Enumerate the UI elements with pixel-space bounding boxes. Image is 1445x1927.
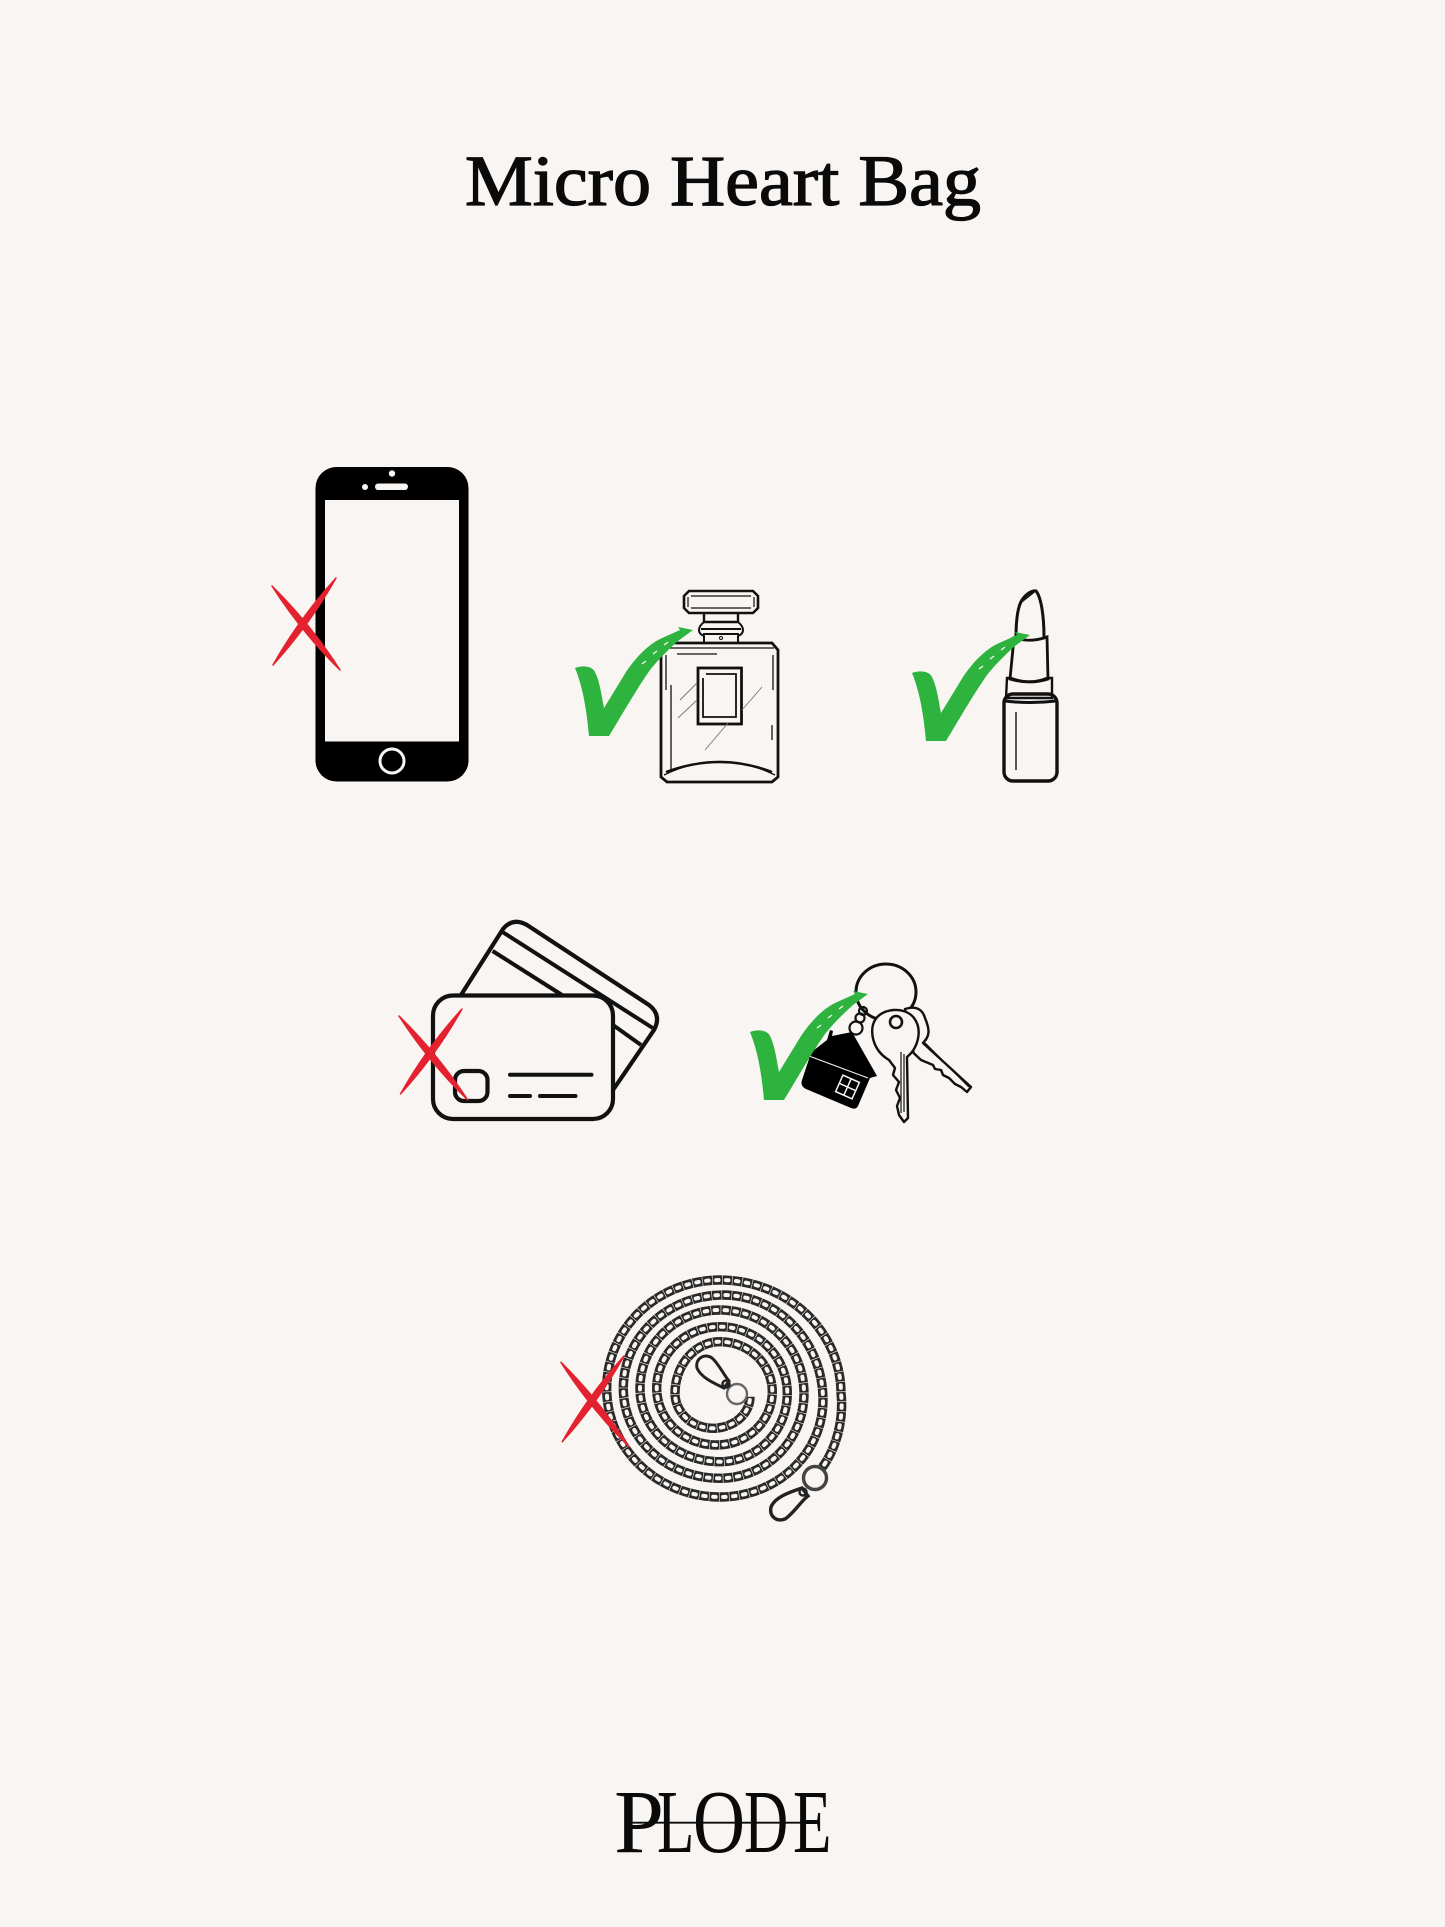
keychain links [850,1007,867,1034]
red cross [399,1009,468,1100]
icon: coiled chain strap with red cross [561,1280,842,1520]
green check [912,632,1030,741]
green check [575,627,693,736]
logo: PLODE wordmark [614,1771,831,1872]
lipstick [1004,591,1057,781]
key front [872,1010,919,1122]
logo: PLODE wordmark: P [614,1773,664,1872]
outer clasp [771,1466,826,1520]
icon: credit cards with red cross [399,922,657,1119]
title: Micro Heart Bag [465,141,981,221]
chain spiral [607,1280,842,1497]
inner clasp [697,1356,747,1404]
key ring [856,964,916,1020]
logo: PLODE wordmark: E [793,1772,831,1872]
logo: PLODE wordmark: L [657,1771,694,1872]
green check [750,991,868,1100]
icon: house keys with green check [750,964,971,1122]
logo: PLODE wordmark: O [693,1771,745,1872]
red cross [272,578,340,670]
back card [461,922,657,1090]
icon: smartphone with red cross [272,467,468,782]
icon: lipstick with green check [912,591,1057,781]
logo: PLODE wordmark: D [744,1771,788,1872]
key back [905,1008,971,1092]
card stripes [493,932,653,1045]
red cross [561,1356,629,1447]
front card [433,996,613,1119]
house keychain [802,1030,877,1109]
icon: perfume bottle with green check [575,591,778,782]
phone [316,467,468,782]
perfume bottle [661,591,778,782]
